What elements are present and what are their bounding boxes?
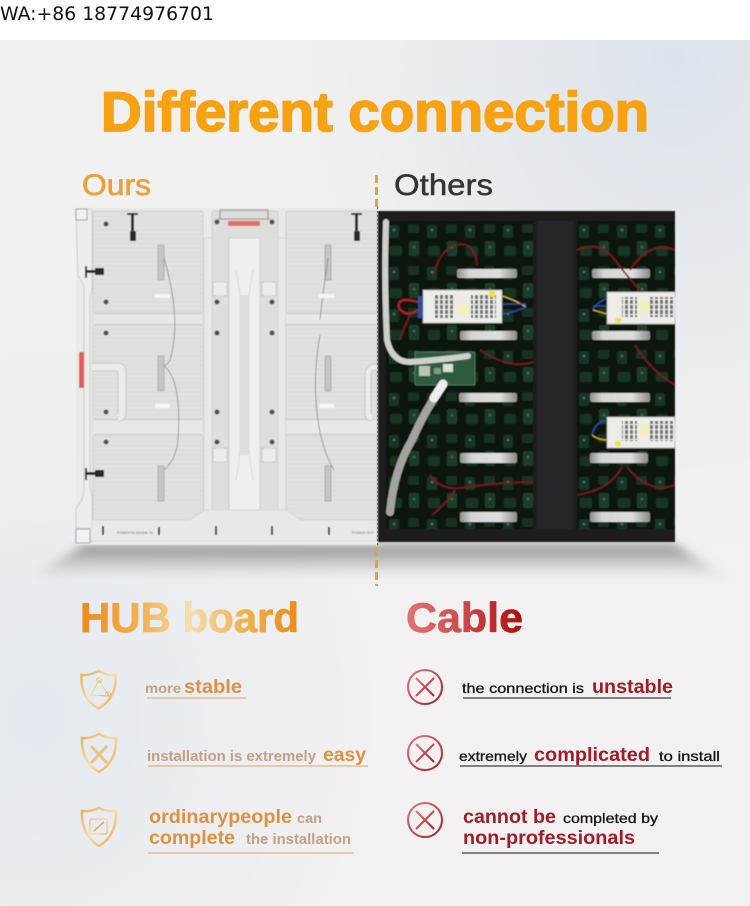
power supplies <box>423 290 675 448</box>
black latches <box>85 213 362 480</box>
panel: ours HUB cabinet back: POWER OUT <box>352 531 374 535</box>
module brackets <box>158 245 331 501</box>
mount holes <box>104 220 274 444</box>
left cabinet rail <box>76 209 92 541</box>
text: ordinary people can complete the installation: can <box>297 810 322 826</box>
text: more stable <box>145 676 246 698</box>
contact line: WA:+86 18774976701 <box>0 4 214 25</box>
heading: HUB board: HUB board <box>80 594 299 641</box>
text: cannot be completed by non-professionals: cannot be <box>463 807 556 828</box>
text: the connection is unstable <box>462 677 673 698</box>
icon: x circle complicated <box>408 736 442 770</box>
red latch <box>79 352 84 388</box>
frame columns <box>76 238 377 541</box>
text: extremely complicated to install <box>459 745 722 766</box>
flat ribbons <box>457 269 650 522</box>
controller card <box>415 352 475 385</box>
text: the connection is unstable: the connection is <box>462 680 584 696</box>
thin wires <box>164 258 334 470</box>
text: installation is extremely easy: easy <box>323 744 366 766</box>
power labels: POWER IN SIGNAL IN <box>117 531 153 535</box>
center cover <box>229 238 260 510</box>
text: cannot be completed by non-professionals: completed by <box>563 810 658 826</box>
text: installation is extremely easy: installation is extremely <box>147 749 316 765</box>
text: extremely complicated to install: complicated <box>534 745 650 766</box>
heading: others: Others <box>394 169 493 202</box>
corner hardware <box>76 209 90 543</box>
white labels <box>155 294 334 408</box>
top handle <box>218 210 270 220</box>
bottom connectors <box>102 526 330 535</box>
ground shadow <box>26 544 732 579</box>
text: installation is extremely easy <box>147 744 368 766</box>
text: more stable: more <box>145 680 181 696</box>
text: extremely complicated to install: extremely <box>459 748 527 764</box>
heading: ours: Ours <box>82 169 151 202</box>
text: extremely complicated to install: to install <box>659 748 720 764</box>
icon: tools shield <box>82 734 116 772</box>
text: ordinary people can complete the installation: the installation <box>246 832 351 848</box>
module cells <box>93 211 377 521</box>
heading: Cable: Cable <box>406 594 523 641</box>
text: cannot be completed by non-professionals: non-professionals <box>463 828 635 849</box>
panel: others cable cabinet back <box>378 211 675 542</box>
red wires <box>400 244 675 515</box>
icon: stable shield <box>81 671 116 708</box>
side handle <box>92 367 122 418</box>
title: Different connection <box>101 80 649 143</box>
icon: installation shield <box>82 808 116 846</box>
text: ordinary people can complete the installation: ordinarypeople <box>149 806 292 828</box>
text: the connection is unstable: unstable <box>592 677 673 698</box>
center column brackets <box>213 282 276 462</box>
data cable ribbons <box>385 222 468 512</box>
text: ordinary people can complete the installation: complete <box>149 827 235 849</box>
text: cannot be completed by non-professionals <box>462 807 659 854</box>
panel: ours HUB cabinet back <box>76 208 378 545</box>
icon: x circle non-professionals <box>408 803 442 837</box>
text: more stable: stable <box>184 676 242 698</box>
text: ordinary people can complete the installation <box>148 806 354 854</box>
icon: x circle unstable <box>408 670 442 704</box>
terminal wires <box>399 296 607 440</box>
dashed divider <box>376 175 378 586</box>
